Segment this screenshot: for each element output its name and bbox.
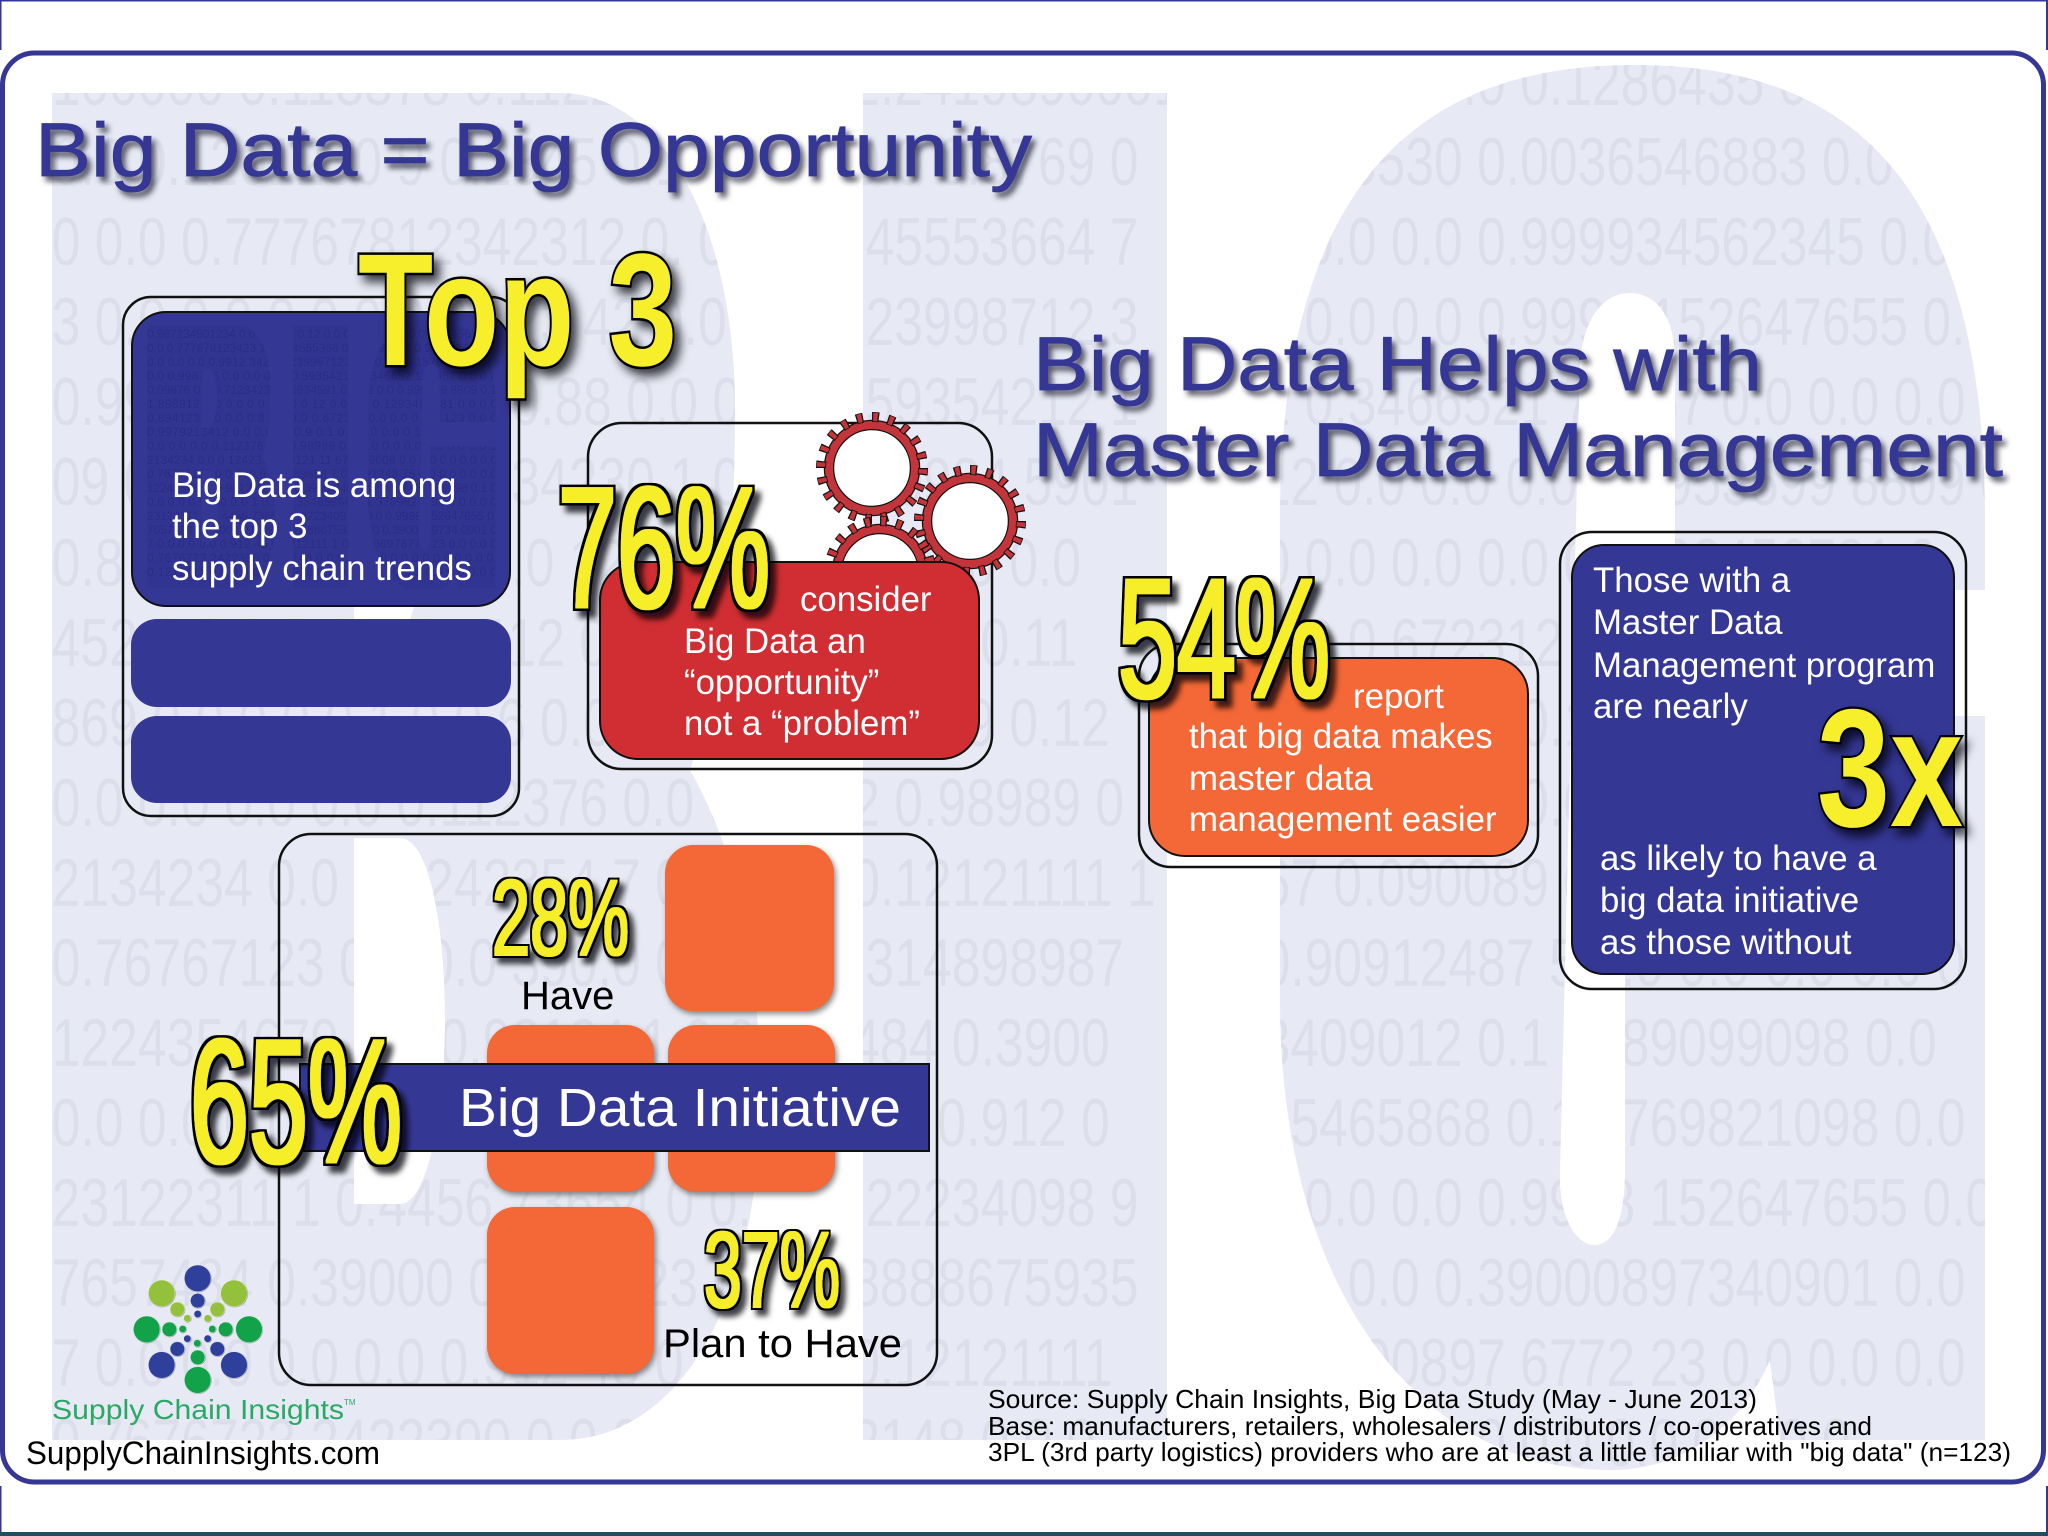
source note — [988, 1384, 2011, 1467]
background: giant BIG lettering filled with numbers: .59354212 1 — [851, 363, 1139, 440]
red box: “opportunity” — [684, 663, 879, 702]
red box: not a “problem” — [684, 704, 920, 743]
background: giant BIG lettering filled with numbers: 67 0.090089 0.0 0.0 0.0 0.0 0. — [1262, 844, 1951, 921]
background: giant BIG lettering filled with numbers: 0 0.0 0.0 0.999934562345 0.0 0 — [1262, 203, 1994, 280]
orange square: have — [665, 845, 834, 1011]
blue box: top trend — [132, 312, 510, 606]
background: giant BIG lettering filled with numbers: 0 0.8 0.11 — [851, 604, 1077, 681]
stat: 37% plan to have: Plan to Have — [663, 1322, 902, 1366]
background: giant BIG lettering filled with numbers: 8888675935 — [851, 1244, 1139, 1321]
blue box: top trend: Big Data is among — [172, 466, 456, 505]
source note: Source: Supply Chain Insights, Big Data Study (May - June 2013) — [988, 1384, 1757, 1414]
background: giant BIG lettering filled with numbers: 0.0 0.8769 0 — [851, 123, 1138, 200]
heading: master data management: Big Data Helps with — [1033, 322, 1762, 407]
background: giant BIG lettering filled with numbers: 0.7676723 2422390 0.0 0.0 0.0 — [52, 1404, 770, 1481]
panel: 76% opportunity — [558, 417, 1021, 769]
stat: 28% have — [492, 857, 629, 1018]
background: giant BIG lettering filled with numbers: 0.8 0.0 0.0 0.0 0.0 0.0 12 0.0 — [52, 524, 712, 601]
red box: Big Data an — [684, 622, 866, 661]
background: giant BIG lettering filled with numbers: 3 0.0 0.0 0.9998 152647655 0.0 — [1262, 1164, 1994, 1241]
orange square: middle left — [487, 1025, 654, 1192]
background: giant BIG lettering filled with numbers: 3 0.0 0.0 0.0 0.0 0.923 42 0.0 — [52, 283, 727, 360]
blue box: top trend: 0.0 0.0 0.0 0.9912 3423 0.239987123 0.0 0.9998 152647655 0.0 — [147, 355, 497, 369]
blue box: top trend: 2134234 0.0 0.124235 0.12121 11 67 0.09008 0.0 0.0 0.0 0.0 0.0 — [147, 453, 497, 467]
red box: consider — [800, 580, 932, 619]
website: SupplyChainInsights.com — [26, 1435, 380, 1471]
background: giant BIG lettering filled with numbers: 1 0.3466521 73967 0.0 0.0 0.0 — [1262, 363, 1965, 440]
background: giant BIG lettering filled with numbers: 0.99 0.0 0.0 0.0 0.0 0.88 0.0 0 — [52, 363, 741, 440]
background: giant BIG lettering filled with numbers: 2148 0.0 0 — [851, 1404, 1095, 1481]
source note: 3PL (3rd party logistics) providers who are at least a little familiar with "big data" (n=123) — [988, 1437, 2011, 1467]
icon: gears — [821, 417, 1021, 623]
background: giant BIG lettering filled with numbers: .45553664 7 — [851, 203, 1139, 280]
background: giant BIG lettering filled with numbers: 0.90912487 5 0.0 0.0 0.0 0.0 0 — [1262, 924, 1965, 1001]
background: giant BIG lettering filled with numbers: 0.0900897 6772 23 0.0 0.0 0.0 — [1262, 1324, 1965, 1401]
background: giant BIG lettering filled with numbers: 0.0 0.0 0.0 0.1 0.0 0.0 0.0 0.0 — [1262, 684, 1937, 761]
background: giant BIG lettering filled with numbers: 12 0.0 0.0 — [851, 524, 1081, 601]
panel: big data initiative — [190, 834, 937, 1385]
background: giant BIG lettering filled with numbers: 2.2419890001 — [851, 43, 1182, 120]
blue box: top trend: 0.7676723 2422390 0.0 2148 0.0 0.0 0.0 0.0 0.0 0.0 0.0 0.0 0. — [147, 551, 497, 565]
blue box: Those with a — [1593, 561, 1791, 600]
panel: 54% easier — [1118, 544, 1538, 867]
blue box: as those without — [1600, 923, 1852, 962]
background: giant BIG lettering filled with numbers: 100000 0.118878 0.1122 3409 0.1 — [52, 43, 834, 120]
background: giant BIG lettering filled with numbers: 0.0 0.912 0 — [851, 1084, 1110, 1161]
background: giant BIG lettering filled with numbers: 0.12121111 1 — [851, 844, 1156, 921]
logo: Supply Chain Insights: TM — [344, 1398, 356, 1407]
blue box: Management program — [1593, 646, 1935, 685]
background: giant BIG lettering filled with numbers: 0 0.0 0.77767812342312 0. 0.0 0 — [52, 203, 813, 280]
background: giant BIG lettering filled with numbers: 9 0.0 0.0 0.9998 152647655 0. — [1262, 283, 1965, 360]
background: giant BIG lettering filled with numbers: 09 0.0 0.0 0.0 0.71234230 1 0.0 — [52, 443, 784, 520]
stat: 37% plan to have: 37% — [704, 1209, 840, 1330]
blue box: top trend: 0.0 0.777678123423 120 1.4555366 0.0 0.999934 0.0 0.0 0.12345 — [147, 341, 497, 355]
blue box: top trend: 7657484 0.39000 0.0 0912 .8888675935 0.0 0.3900089734 0901 0 — [147, 523, 497, 537]
background: giant BIG lettering filled with numbers: 7 0.0 0.0 0.0 0.0 0.912 45 0.0 — [52, 1324, 727, 1401]
band: big data initiative: Big Data Initiative — [459, 1078, 901, 1138]
stat: 76%: 76% — [558, 452, 770, 644]
blue box: top trend: 7 0.0 0.0 0.0 0.912 45 0.1212111 1 0.09008976772 23 0.0 0.0 0 — [147, 537, 497, 551]
orange box: master data — [1189, 759, 1373, 798]
stat: 28% have: Have — [521, 974, 614, 1018]
background: giant BIG lettering filled with numbers: 484 0.3900 — [851, 1004, 1110, 1081]
blue box: top trend: 0.1212111 0.0 0.0 0.0 0.9998 0.0 0.0 0.0 0.0 0.1 0.0 0.0 0.0 0 — [147, 565, 497, 579]
logo: Supply Chain Insights: Supply Chain Insights — [52, 1394, 344, 1425]
background: giant BIG lettering filled with numbers: 0.0 0.0 0.0 0.0 0.0 0.0 1 0.0 — [52, 1084, 684, 1161]
orange box: management easier — [1189, 800, 1497, 839]
background: giant BIG lettering filled with numbers: 0.0 0.0 0.39000897340901 0.0 — [1262, 1244, 1965, 1321]
title: Big Data = Big Opportunity — [35, 108, 1032, 193]
orange box: report — [1353, 677, 1444, 716]
background: giant BIG lettering filled with numbers: 35465868 0.1 3769821098 0.0 — [1262, 1084, 1966, 1161]
background: giant BIG lettering filled with numbers: 0.76767123 0.0 0.0 390.0 0.0 0 — [52, 924, 770, 1001]
orange square: plan to have — [487, 1207, 654, 1374]
blue box: top trend: 0.76767123 0.0 390.0 .31489898 7 0.9091248 75 0.0 0.0 0.0 0.0 — [147, 467, 497, 481]
blue box: top trend: 0.987234901234 0.0 0.8 0.4 0.12 0.0 0.8765 0.09 0.0 0.234567 0.1 — [147, 327, 497, 341]
background: giant BIG lettering filled with numbers: 0.0 0.0 0.0 0.0 0.112376 0.0 0. — [52, 764, 752, 841]
background: giant BIG lettering filled with numbers: 452 0.0 0.0 0.0 0.7112 0.0 0.0 — [52, 604, 737, 681]
logo: Supply Chain Insights — [52, 1265, 356, 1425]
blue box: top trend: 0.09876 0.0 0.7123423 1.00934591 0.0 12 0.0 0.995359 8809 0.1 — [147, 383, 497, 397]
background: giant BIG lettering filled with numbers: 0 0.0 0.0 0.0 0.1293456781 0. — [1262, 524, 1951, 601]
orange box — [1149, 658, 1528, 856]
blue box: top trend: 0.0 0.0 0.0 0.0 0.0 1 0.912 35465868 0.1 3769821098 0.0 0.0 0 — [147, 495, 497, 509]
source note: Base: manufacturers, retailers, wholesalers / distributors / co-operatives and — [988, 1411, 1872, 1441]
panel: 3x — [1560, 532, 1966, 989]
background: giant BIG lettering filled with numbers: 0.8 0.672312 0.0 0.0 0.0 0.0 0 — [1262, 604, 1951, 681]
blue box: top trend: 23122311 1 0.4456 7365 40 .2223409 89 0.0 0.9998 152647655 0. — [147, 509, 497, 523]
blue box — [1572, 545, 1954, 974]
blue box: are nearly — [1593, 687, 1748, 726]
blue box: big data initiative — [1600, 881, 1859, 920]
blue box: top trend: 0.0 0.998765 0.0 0.0 0.88 0.59354212 0.346652 173967 0.0 0.0 — [147, 369, 497, 383]
blue box: top trend: 1224354679 0.9812 41 484 0.3900 3409012 0.1 7489099098 0.1 0 — [147, 481, 497, 495]
blue box: Master Data — [1593, 603, 1783, 642]
stat: 54%: 54% — [1118, 544, 1330, 734]
background: giant BIG lettering filled with numbers: 3409012 0.1 7489099098 0.0 — [1262, 1004, 1937, 1081]
background: giant BIG lettering filled with numbers: 1224354679 0.0 0.98124 1 0.0 0 — [52, 1004, 799, 1081]
background: giant BIG lettering filled with numbers: 2134234 0.0 0.1242354 7 0.0 0. — [52, 844, 784, 921]
blue bar: second trend — [131, 619, 511, 707]
background: giant BIG lettering filled with numbers: 0.0 0.0 0.0 0.1286435 0 0.0 0.0 0 — [1262, 43, 2023, 120]
background: giant BIG lettering filled with numbers: 23122311 1 0.4456 73654 0 0.0 0 — [52, 1164, 824, 1241]
blue box: top trend: 1.898912 0.0 0.0 0.0 1.2 0.0 12 0.0 0.0 0.1293456781 0.0 0.0 — [147, 397, 497, 411]
blue box: top trend: 0.894123 0.0 0.0 0.8 0.1 0.0 0.672312 0.0 0.0 0.0 0.123 0.0 0 — [147, 411, 497, 425]
blue box: top trend: the top 3 — [172, 507, 307, 546]
band: big data initiative — [300, 1064, 929, 1151]
background: giant BIG lettering filled with numbers: 0.0 0.0 0.0 0.0 0.0 0.0 0.0 — [1262, 1404, 1850, 1481]
background: giant BIG lettering filled with numbers: .22234098 9 — [851, 1164, 1139, 1241]
heading: master data management: Master Data Management — [1033, 408, 2003, 493]
heading: master data management — [1033, 322, 2003, 493]
stat: Top 3: Top 3 — [358, 220, 677, 399]
stat: 65%: 65% — [190, 1004, 402, 1200]
blue box: as likely to have a — [1600, 839, 1877, 878]
orange square: middle right — [668, 1025, 835, 1192]
icon: circle cluster — [133, 1265, 262, 1393]
red box — [600, 562, 979, 759]
background: giant BIG lettering filled with numbers: 34 0.9 0.12 — [851, 684, 1110, 761]
background: giant BIG lettering filled with numbers: 0.12121111 — [851, 1324, 1113, 1401]
background: giant BIG lettering filled with numbers: 2 0.98989 0 — [851, 764, 1124, 841]
stat: 28% have: 28% — [492, 857, 629, 978]
background: giant BIG lettering filled with numbers: .00934 5901 — [851, 443, 1139, 520]
blue box: top trend: supply chain trends — [172, 549, 472, 588]
background: giant BIG lettering filled with numbers: 2356530 0.0036546883 0.0 0.0 — [1262, 123, 1980, 200]
stat: 3x: 3x — [1817, 674, 1963, 862]
background: giant BIG lettering filled with numbers: 0.0 0.1201230 9 0.2345 0.1 0.0 — [52, 123, 770, 200]
panel: top 3 trends — [123, 297, 519, 816]
background: giant BIG lettering filled with numbers: .23998712 3 — [851, 283, 1139, 360]
stat: 37% plan to have — [663, 1209, 902, 1366]
background: giant BIG lettering filled with numbers: 869 0.0 0.0 0.1 0.0 6 0.0 0.0 1 — [52, 684, 741, 761]
orange box: that big data makes — [1189, 717, 1493, 756]
background: giant BIG lettering filled with numbers: 12 0.0 0.0 0.0 0.9953599 8809 0 — [1262, 443, 2009, 520]
background: giant BIG lettering filled with numbers: 0.0 0.0 0.0 0.0 0.0 0.0 0.0 0.0 — [1262, 764, 1937, 841]
blue box: top trend: 0.9979213412 0.0 0.0 34 0.9 0.1 0.0 0.0 0.0 0.1 0.0 0.0 0.0 0 — [147, 425, 497, 439]
blue box: top trend: 0.0 0.0 0.0 0.112376 0.2 0.98989 0.0 0.0 0.0 0.0 0.0 0.0 0.0 1 — [147, 439, 497, 453]
background: giant BIG lettering filled with numbers: .314898987 — [851, 924, 1124, 1001]
blue bar: third trend — [131, 716, 511, 803]
background: giant BIG lettering filled with numbers: 7657484 0.39000 0.0 09123 0.0 — [52, 1244, 784, 1321]
